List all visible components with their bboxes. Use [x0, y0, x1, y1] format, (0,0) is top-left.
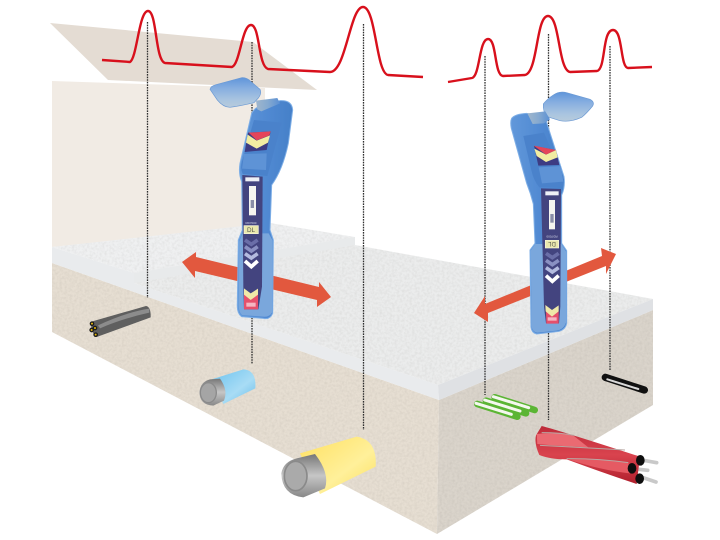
yellow foot chevron: [545, 305, 559, 317]
arrow: left sweep direction: [182, 252, 331, 307]
pipe bore: [200, 383, 216, 403]
buried cable: red twisted: [535, 426, 657, 484]
grey liner: [281, 454, 326, 497]
purple front panel: [242, 175, 263, 309]
yellow foot chevron: [244, 288, 258, 300]
foot marks: [246, 303, 256, 307]
antenna pad: [210, 78, 261, 107]
LCD display: [244, 226, 258, 234]
upper face recess: [241, 120, 282, 176]
cable sheath: [91, 306, 151, 337]
pavement: lower surface: [134, 237, 653, 385]
direction chevrons: [546, 253, 559, 281]
pavement: step faces: [134, 237, 355, 283]
grip neck: [256, 98, 280, 111]
yellow duct: [300, 437, 376, 494]
purple front panel: [541, 188, 561, 323]
sheath highlight: [98, 309, 149, 328]
keypad: [539, 166, 563, 183]
upper face recess: [523, 133, 564, 187]
grip neck: [527, 111, 550, 124]
buried pipe: blue: [199, 369, 255, 406]
pavement: left edge: [52, 247, 439, 400]
buried cables: green bundle: [476, 397, 535, 417]
soil: right face: [437, 310, 653, 534]
soil: left face: [52, 263, 439, 534]
black insulation ends: [628, 455, 645, 484]
pipe bore: [284, 461, 307, 491]
screen label: yellow chevron: [246, 135, 270, 149]
LCD text: DL: [548, 240, 556, 246]
screen label: red: [249, 131, 271, 140]
twist seams: [540, 433, 628, 463]
back wall: [52, 81, 265, 247]
buried cable: grey multi-core: [90, 306, 151, 337]
green strand middle: [485, 400, 526, 413]
green strand back: [493, 397, 535, 410]
lower body highlight: [531, 244, 566, 333]
pavement: raised surface: [52, 223, 355, 273]
dotted drop lines: [148, 22, 610, 430]
LCD display: [545, 240, 559, 248]
barcode: [251, 200, 254, 208]
body: [237, 101, 293, 319]
blue duct: [212, 369, 255, 404]
locator device: right: [511, 92, 593, 334]
white label: [249, 186, 256, 215]
keypad: [242, 153, 267, 170]
ground block: [52, 223, 653, 534]
LCD text: DL: [247, 227, 256, 234]
screen label: purple: [534, 146, 559, 166]
twist highlight lower: [568, 459, 630, 473]
screen label: purple: [245, 131, 271, 152]
buried pipe: yellow: [281, 437, 376, 497]
conductor sheath: [605, 377, 644, 390]
direction chevrons: [245, 240, 258, 267]
screen label: red: [534, 146, 556, 155]
logo strip: [245, 177, 259, 181]
grey liner: [199, 379, 225, 406]
foot marks: [548, 317, 557, 321]
conductor highlight: [607, 379, 638, 389]
antenna pad: [543, 92, 593, 121]
twist highlight upper: [537, 433, 588, 447]
pavement: right edge: [438, 299, 653, 400]
model name: RD7000: [246, 221, 257, 225]
core ends: [90, 322, 97, 336]
pink foot label: [244, 294, 258, 309]
pink foot label: [546, 311, 559, 324]
buried cable: black conductor: [605, 377, 644, 390]
lower body highlight: [239, 233, 273, 317]
white label: [549, 200, 555, 229]
logo strip: [545, 191, 559, 195]
signal trace: left: [102, 7, 423, 77]
screen label: yellow chevron: [534, 149, 558, 162]
locator device: left: [210, 78, 293, 319]
silver wires: [633, 460, 657, 482]
barcode: [550, 214, 554, 223]
body: [511, 113, 567, 334]
green strand front: [476, 403, 517, 417]
arrow: right sweep direction: [474, 248, 616, 322]
red sheath: [535, 426, 640, 484]
tilted signal plane: [50, 23, 317, 90]
signal trace: right: [448, 16, 652, 82]
model name: RD7000: [546, 234, 557, 238]
